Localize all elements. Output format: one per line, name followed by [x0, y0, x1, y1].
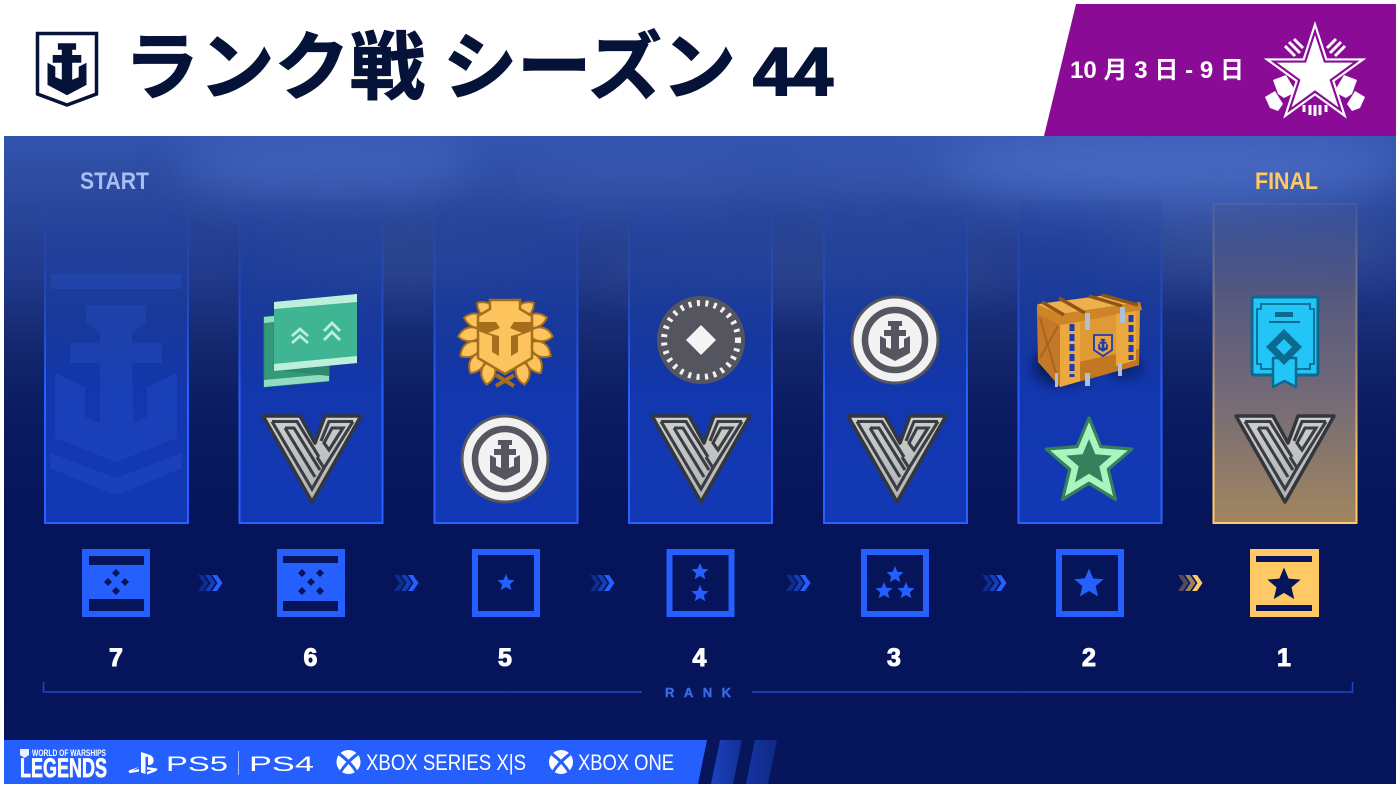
- rank numbers: 4: [693, 644, 707, 672]
- title: 44: [753, 34, 833, 110]
- game logo: LEGENDS: [20, 753, 107, 783]
- date banner: [1044, 4, 1396, 136]
- rank numbers: 6: [304, 644, 317, 672]
- title: シーズン: [443, 8, 736, 115]
- rank numbers: 5: [498, 644, 512, 672]
- column: rank 5: [434, 200, 578, 523]
- icon: wooden crate: [1034, 295, 1143, 387]
- icon: grey V badge: [1236, 416, 1334, 502]
- column: rank 2: [1018, 200, 1162, 523]
- platform divider: [238, 751, 239, 775]
- Xbox One label: XBOX ONE: [578, 750, 674, 775]
- rank icon 6: [277, 549, 345, 617]
- icon: grey V badge: [652, 416, 750, 502]
- game logo: [20, 748, 107, 783]
- rank numbers: 1: [1277, 644, 1291, 672]
- watermark shield: [50, 274, 182, 495]
- icon: green flags: [264, 294, 357, 387]
- arrow 3 to 2: [982, 575, 1006, 591]
- icon: diamond coin: [657, 296, 745, 384]
- icon: anchor coin: [852, 297, 938, 383]
- title: [124, 8, 833, 115]
- arrow 5 to 4: [590, 575, 614, 591]
- date text: 10 月 3 日 - 9 日: [1070, 57, 1244, 84]
- final label: FINAL: [1255, 168, 1318, 195]
- column: rank 6: [240, 200, 382, 523]
- column: rank 7 start: [45, 200, 188, 523]
- icon: grey V badge: [848, 416, 946, 502]
- rank icon 7: [82, 549, 150, 617]
- header: shield logo: [38, 34, 96, 105]
- rank numbers: [109, 644, 1291, 672]
- rank numbers: 7: [109, 644, 123, 672]
- rank icon 1: [1250, 549, 1319, 617]
- arrow 6 to 5: [394, 575, 418, 591]
- rank icon 2: [1059, 552, 1121, 614]
- rank numbers: 2: [1082, 644, 1096, 672]
- rank icon 5: [475, 552, 537, 614]
- arrow 2 to 1: [1178, 575, 1202, 591]
- season star emblem: [1264, 21, 1366, 119]
- column: rank 3: [824, 200, 967, 523]
- footer slanted stripes: [711, 740, 777, 784]
- icon: gold laurel medal: [458, 297, 553, 386]
- arrow 4 to 3: [786, 575, 810, 591]
- column: rank 1 final: [1214, 204, 1356, 523]
- rank axis: [44, 682, 1352, 700]
- icon: green star: [1046, 418, 1132, 499]
- title: ランク戦: [124, 8, 425, 115]
- PS4 label: PS4: [249, 753, 315, 776]
- rank numbers: 3: [887, 644, 901, 672]
- icon: anchor coin: [462, 416, 548, 502]
- Xbox Series label: XBOX SERIES X|S: [366, 750, 526, 775]
- rank icon 3: [864, 552, 926, 614]
- start label: START: [80, 168, 149, 195]
- footer platforms bar: [4, 740, 777, 784]
- rank axis label: RANK: [665, 685, 732, 700]
- column: rank 4: [629, 200, 772, 523]
- icon: blue certificate: [1252, 297, 1318, 387]
- PlayStation mark: [129, 752, 157, 774]
- PS5 label: PS5: [166, 753, 228, 776]
- rank icon 4: [670, 552, 732, 614]
- arrow 7 to 6: [198, 575, 222, 591]
- Xbox mark: [549, 750, 573, 774]
- game logo: WORLD OF WARSHIPS: [32, 748, 106, 759]
- icon: grey V badge: [263, 416, 361, 502]
- Xbox mark: [336, 750, 360, 774]
